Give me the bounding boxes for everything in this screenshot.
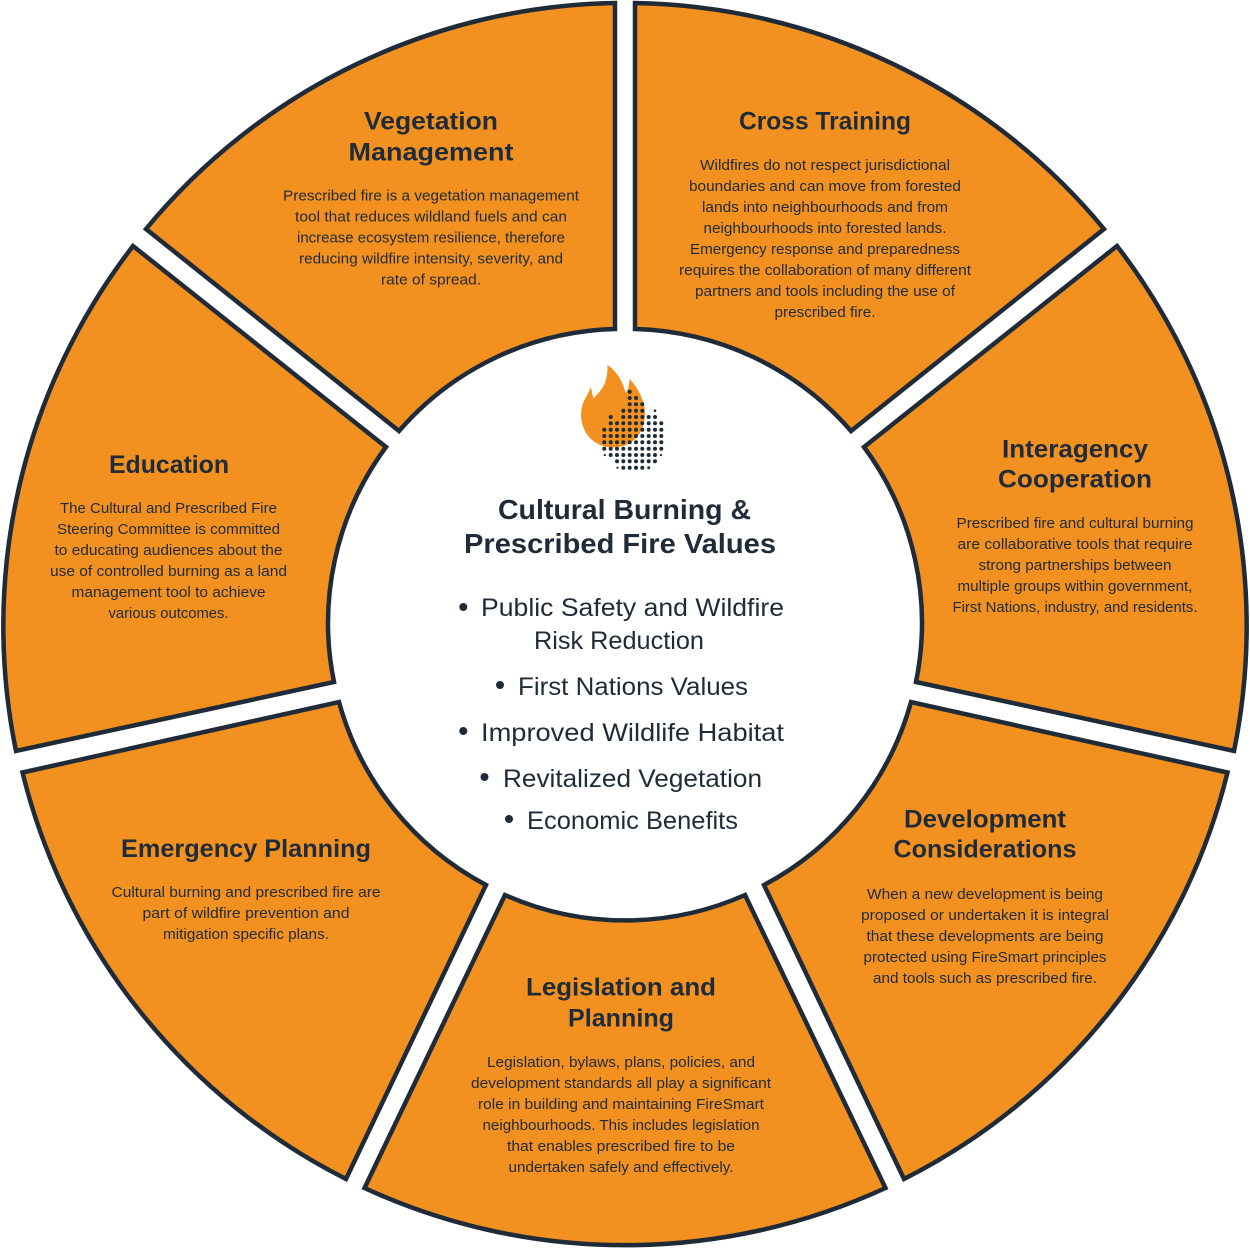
heading: Interagency Cooperation: Cooperation xyxy=(998,466,1152,494)
heading: Interagency Cooperation: Interagency xyxy=(1002,435,1148,463)
text: Education description: management tool to achieve xyxy=(72,585,266,601)
icon: flame with dot pattern xyxy=(581,365,663,470)
heading: Education: Education xyxy=(109,451,229,479)
text: Vegetation Management description: rate of spread. xyxy=(381,272,481,288)
text: Emergency Planning description: part of wildfire prevention and xyxy=(142,906,350,922)
heading: Legislation and Planning xyxy=(526,973,716,1032)
text: Development Considerations description: When a new development is being xyxy=(867,887,1103,903)
text: Legislation and Planning description: neighbourhoods. This includes legislation xyxy=(482,1118,760,1134)
text: Cross Training description: Wildfires do not respect jurisdictional xyxy=(700,158,950,174)
panel: Emergency Planning xyxy=(22,702,486,1179)
text: Cross Training description: requires the collaboration of many different xyxy=(679,263,971,279)
text: Development Considerations description: and tools such as prescribed fire. xyxy=(873,971,1097,987)
heading: Legislation and Planning: Legislation and xyxy=(526,973,716,1001)
text: Interagency Cooperation description: First Nations, industry, and residents. xyxy=(952,600,1198,616)
text: Development Considerations description: proposed or undertaken it is integral xyxy=(861,908,1109,924)
text: Education description: various outcomes. xyxy=(108,606,228,622)
text: Emergency Planning description xyxy=(112,885,380,943)
text: Cross Training description: lands into neighbourhoods and from xyxy=(702,200,948,216)
text: Emergency Planning description: Cultural burning and prescribed fire are xyxy=(112,885,380,901)
text: Interagency Cooperation description xyxy=(952,516,1198,616)
heading: Cross Training: Cross Training xyxy=(739,108,911,136)
title: Cultural Burning & xyxy=(498,494,751,525)
text: Cross Training description xyxy=(679,158,971,321)
text: Legislation and Planning description xyxy=(471,1055,771,1176)
panel: Interagency Cooperation xyxy=(864,246,1247,751)
heading: Vegetation Management: Vegetation xyxy=(364,107,498,135)
text: Interagency Cooperation description: Prescribed fire and cultural burning xyxy=(956,516,1194,532)
panel: Cross Training xyxy=(635,3,1104,431)
heading: Emergency Planning: Emergency Planning xyxy=(121,835,371,863)
text: Cross Training description: Emergency response and preparedness xyxy=(690,242,960,258)
text: Vegetation Management description xyxy=(283,188,579,288)
heading: Development Considerations xyxy=(894,806,1076,864)
heading: Vegetation Management: Management xyxy=(348,138,514,166)
text: Cross Training description: partners and tools including the use of xyxy=(695,284,956,300)
text: Interagency Cooperation description: multiple groups within government, xyxy=(958,579,1192,595)
text: Education description: to educating audiences about the xyxy=(54,543,282,559)
list: fire values xyxy=(459,594,784,835)
title: Prescribed Fire Values xyxy=(464,528,776,559)
text: Education description xyxy=(50,501,287,622)
panel: Vegetation Management xyxy=(146,3,615,431)
text: Interagency Cooperation description: are collaborative tools that require xyxy=(958,537,1192,553)
text: Legislation and Planning description: role in building and maintaining FireSmart xyxy=(478,1097,764,1113)
text: Cross Training description: prescribed fire. xyxy=(774,305,876,321)
text: Vegetation Management description: tool that reduces wildland fuels and can xyxy=(295,210,567,226)
list: fire values: Improved Wildlife Habitat xyxy=(481,719,784,747)
text: Vegetation Management description: increase ecosystem resilience, therefore xyxy=(297,230,565,246)
text: Legislation and Planning description: that enables prescribed fire to be xyxy=(507,1139,735,1155)
text: Education description: The Cultural and Prescribed Fire xyxy=(60,501,277,517)
heading: Development Considerations: Considerations xyxy=(894,836,1076,864)
panel: Education xyxy=(3,246,386,751)
list: fire values: Revitalized Vegetation xyxy=(503,765,762,793)
heading: Interagency Cooperation xyxy=(998,435,1152,494)
heading: Legislation and Planning: Planning xyxy=(568,1004,674,1032)
title xyxy=(464,494,776,559)
text: Legislation and Planning description: development standards all play a significant xyxy=(471,1076,771,1092)
text: Cross Training description: neighbourhoods into forested lands. xyxy=(704,221,946,237)
list: fire values: Public Safety and Wildfire xyxy=(481,594,784,622)
text: Education description: use of controlled burning as a land xyxy=(50,564,287,580)
text: Interagency Cooperation description: strong partnerships between xyxy=(978,558,1172,574)
text: Emergency Planning description: mitigation specific plans. xyxy=(163,927,329,943)
text: Cross Training description: boundaries and can move from forested xyxy=(689,179,961,195)
list: fire values: Risk Reduction xyxy=(534,627,704,655)
text: Legislation and Planning description: undertaken safely and effectively. xyxy=(508,1160,734,1176)
text: Development Considerations description: that these developments are being xyxy=(866,929,1104,945)
text: Vegetation Management description: Prescribed fire is a vegetation management xyxy=(283,188,579,204)
list: fire values: First Nations Values xyxy=(518,673,748,701)
text: Development Considerations description xyxy=(861,887,1109,987)
text: Development Considerations description: protected using FireSmart principles xyxy=(864,950,1106,966)
text: Legislation and Planning description: Legislation, bylaws, plans, policies, and xyxy=(487,1055,755,1071)
panel: Legislation and Planning xyxy=(364,895,886,1245)
heading: Vegetation Management xyxy=(348,107,514,166)
text: Education description: Steering Committee is committed xyxy=(57,522,280,538)
heading: Development Considerations: Development xyxy=(904,806,1067,834)
panel: Development Considerations xyxy=(764,702,1228,1179)
text: Vegetation Management description: reducing wildfire intensity, severity, and xyxy=(299,252,563,268)
list: fire values: Economic Benefits xyxy=(527,807,738,835)
